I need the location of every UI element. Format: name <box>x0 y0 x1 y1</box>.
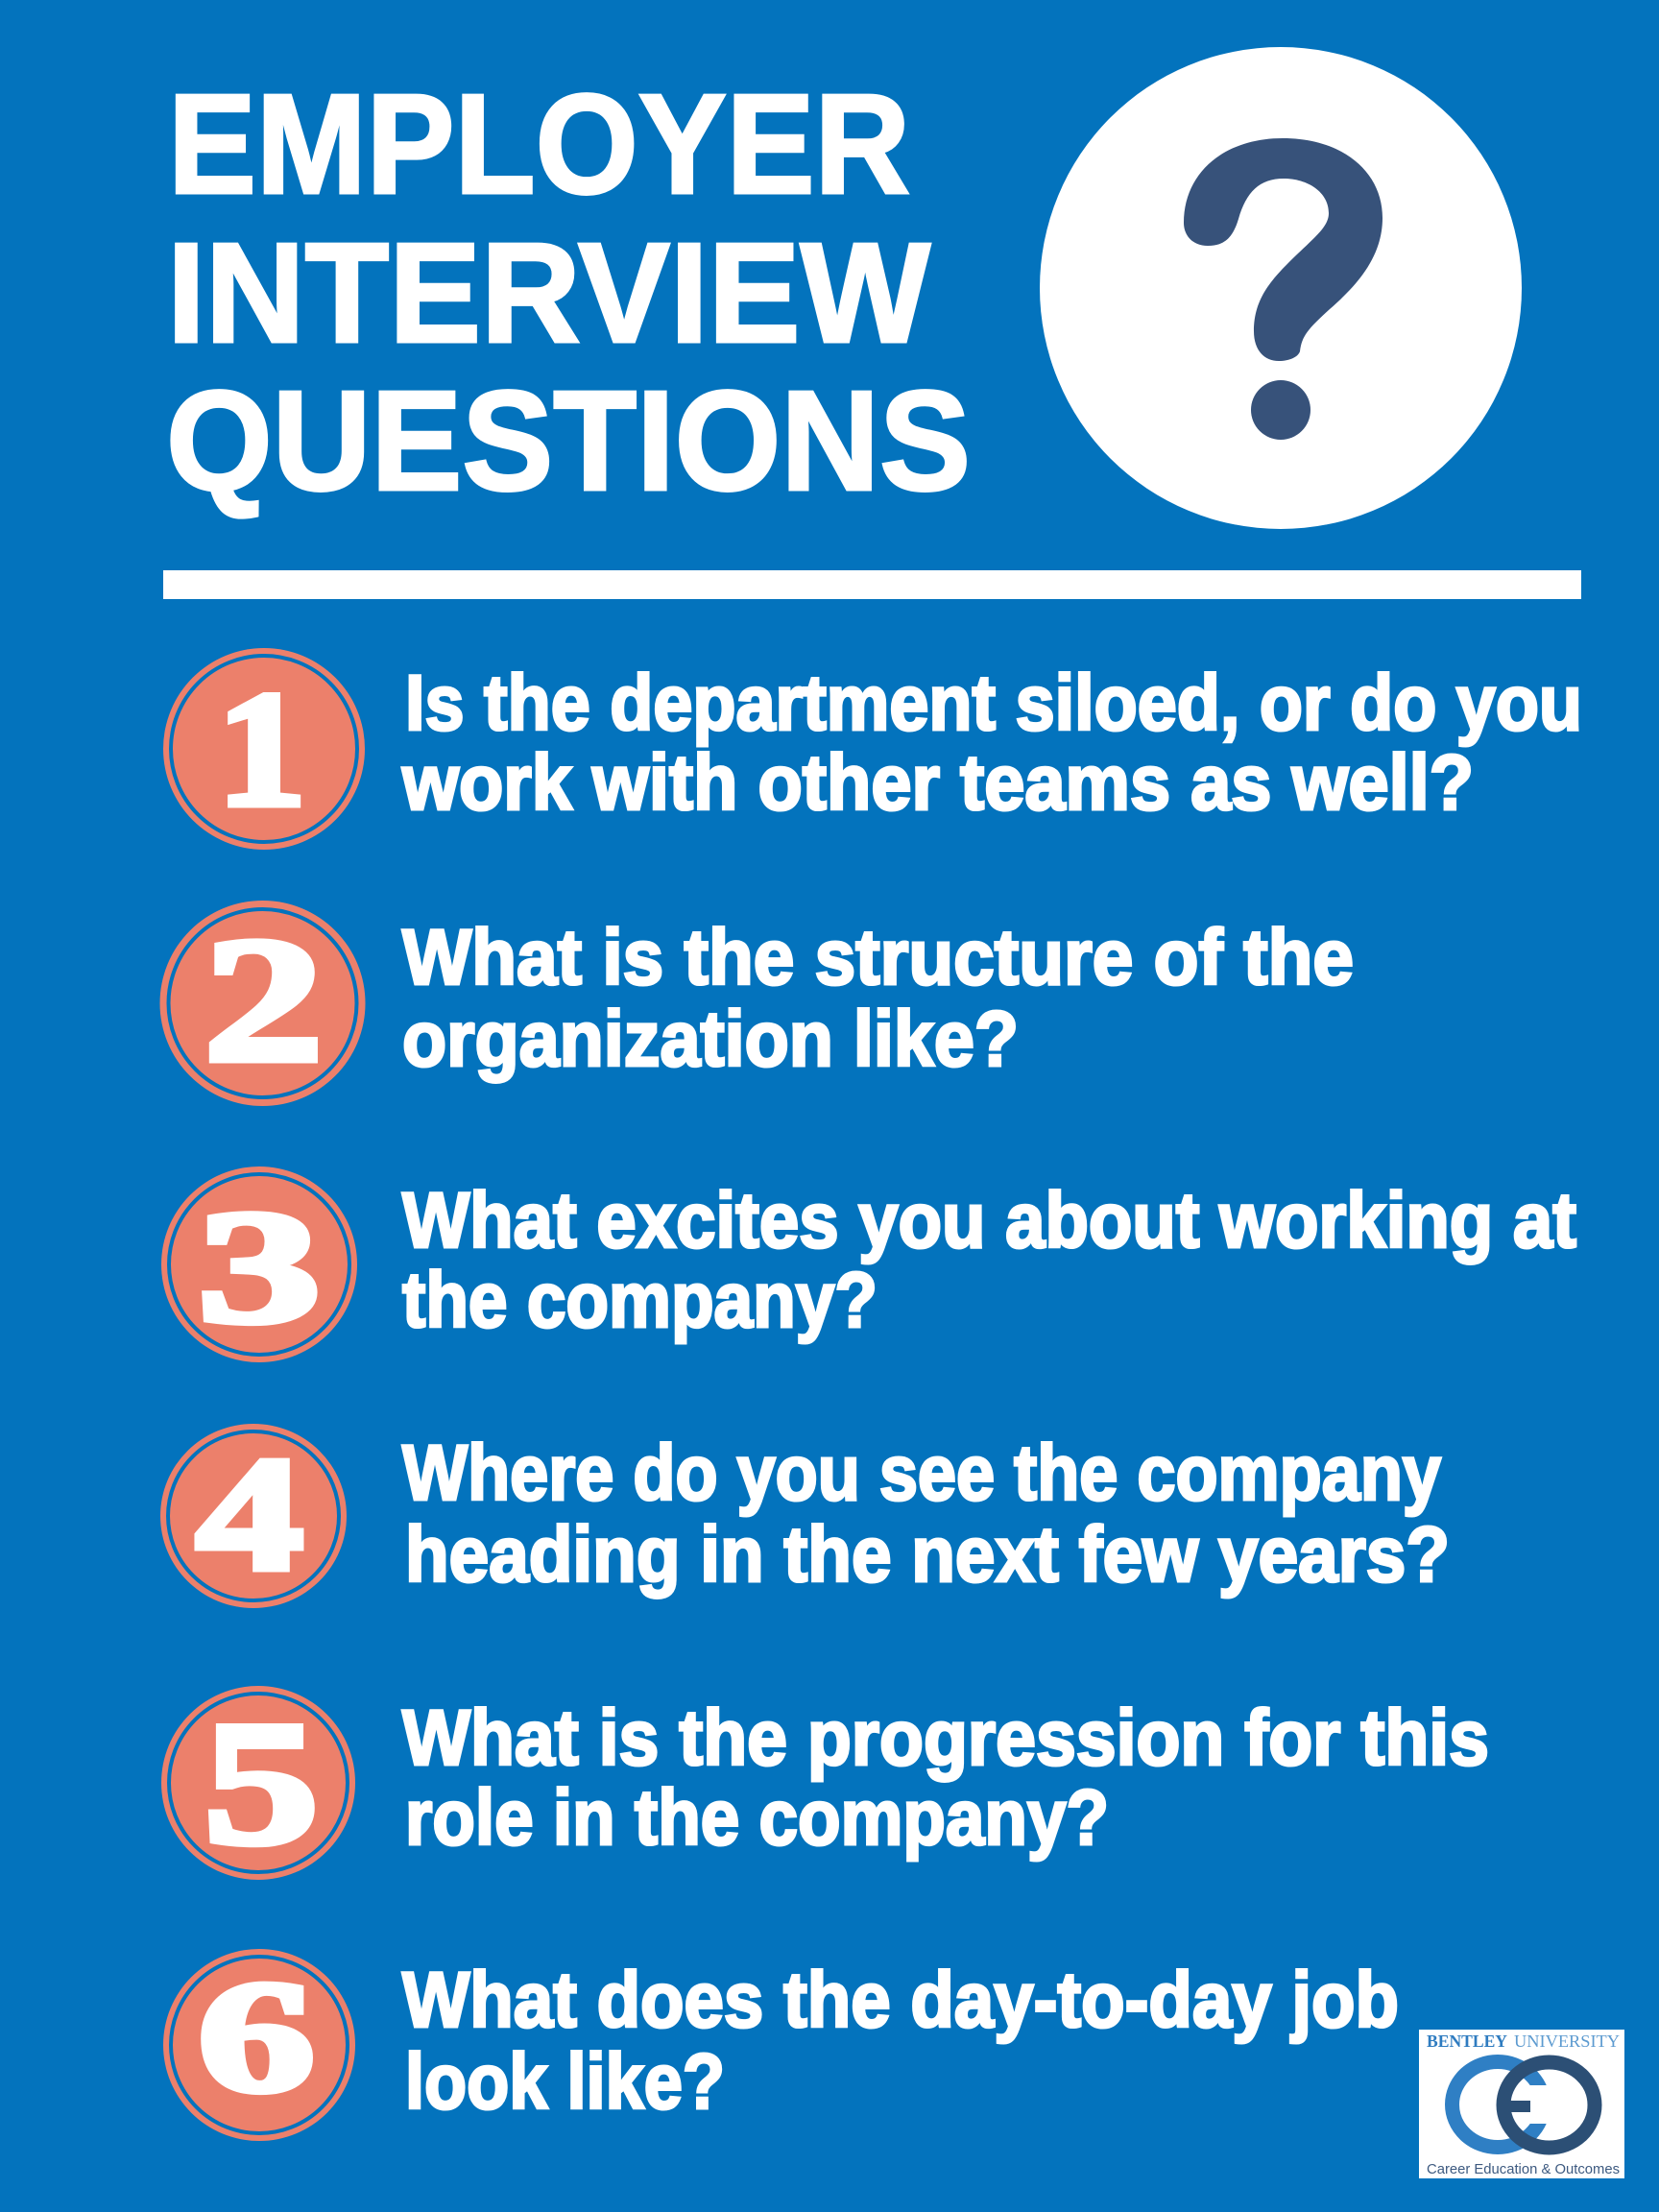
question 3 <box>161 1166 1576 1362</box>
title <box>166 65 971 520</box>
number badge 2: 2 <box>204 902 324 1099</box>
question text 1: work with other teams as well? <box>401 739 1474 827</box>
question 5 <box>161 1685 1489 1881</box>
logo monogram <box>1452 2062 1595 2148</box>
title: INTERVIEW <box>167 214 930 373</box>
question text 2: What is the structure of the <box>402 914 1354 1001</box>
logo: Bentley University Career Education & Outcomes <box>1419 2030 1624 2178</box>
question 4 <box>160 1424 1450 1608</box>
question text 2 <box>402 914 1354 1083</box>
question text 5 <box>402 1695 1489 1862</box>
question text 3 <box>402 1177 1576 1344</box>
number badge 3 <box>161 1166 357 1362</box>
icon: question mark in white circle <box>1040 47 1522 529</box>
title: EMPLOYER <box>168 65 910 224</box>
question 1 <box>163 648 1582 850</box>
question text 6: What does the day-to-day job <box>402 1957 1399 2044</box>
number badge 1 <box>163 648 365 850</box>
number badge 5: 5 <box>204 1685 319 1881</box>
logo wordmark: BENTLEY <box>1427 2032 1507 2051</box>
number badge 6 <box>163 1948 355 2141</box>
number badge 4 <box>160 1424 347 1608</box>
question text 5: role in the company? <box>405 1774 1109 1862</box>
question text 6: look like? <box>405 2038 725 2126</box>
logo wordmark: UNIVERSITY <box>1514 2032 1620 2051</box>
title rule <box>163 570 1581 599</box>
number badge 5 <box>161 1685 355 1881</box>
title: QUESTIONS <box>166 362 971 520</box>
logo caption: Career Education & Outcomes <box>1427 2162 1620 2177</box>
number badge 3: 3 <box>198 1178 321 1357</box>
question 2 <box>159 901 1354 1106</box>
number badge 2 <box>159 901 365 1106</box>
question text 3: the company? <box>402 1257 878 1344</box>
question text 5: What is the progression for this <box>402 1695 1489 1782</box>
question text 6 <box>402 1957 1399 2126</box>
question text 4: Where do you see the company <box>402 1430 1441 1517</box>
question text 4 <box>402 1430 1450 1599</box>
number badge 4: 4 <box>196 1424 303 1604</box>
question text 1 <box>401 660 1582 827</box>
logo wordmark <box>1427 2032 1620 2051</box>
question 6 <box>163 1948 1399 2141</box>
question text 4: heading in the next few years? <box>405 1511 1450 1599</box>
question text 2: organization like? <box>402 996 1019 1083</box>
number badge 1: 1 <box>217 659 306 841</box>
question text 3: What excites you about working at <box>402 1177 1576 1264</box>
number badge 6: 6 <box>198 1948 315 2125</box>
